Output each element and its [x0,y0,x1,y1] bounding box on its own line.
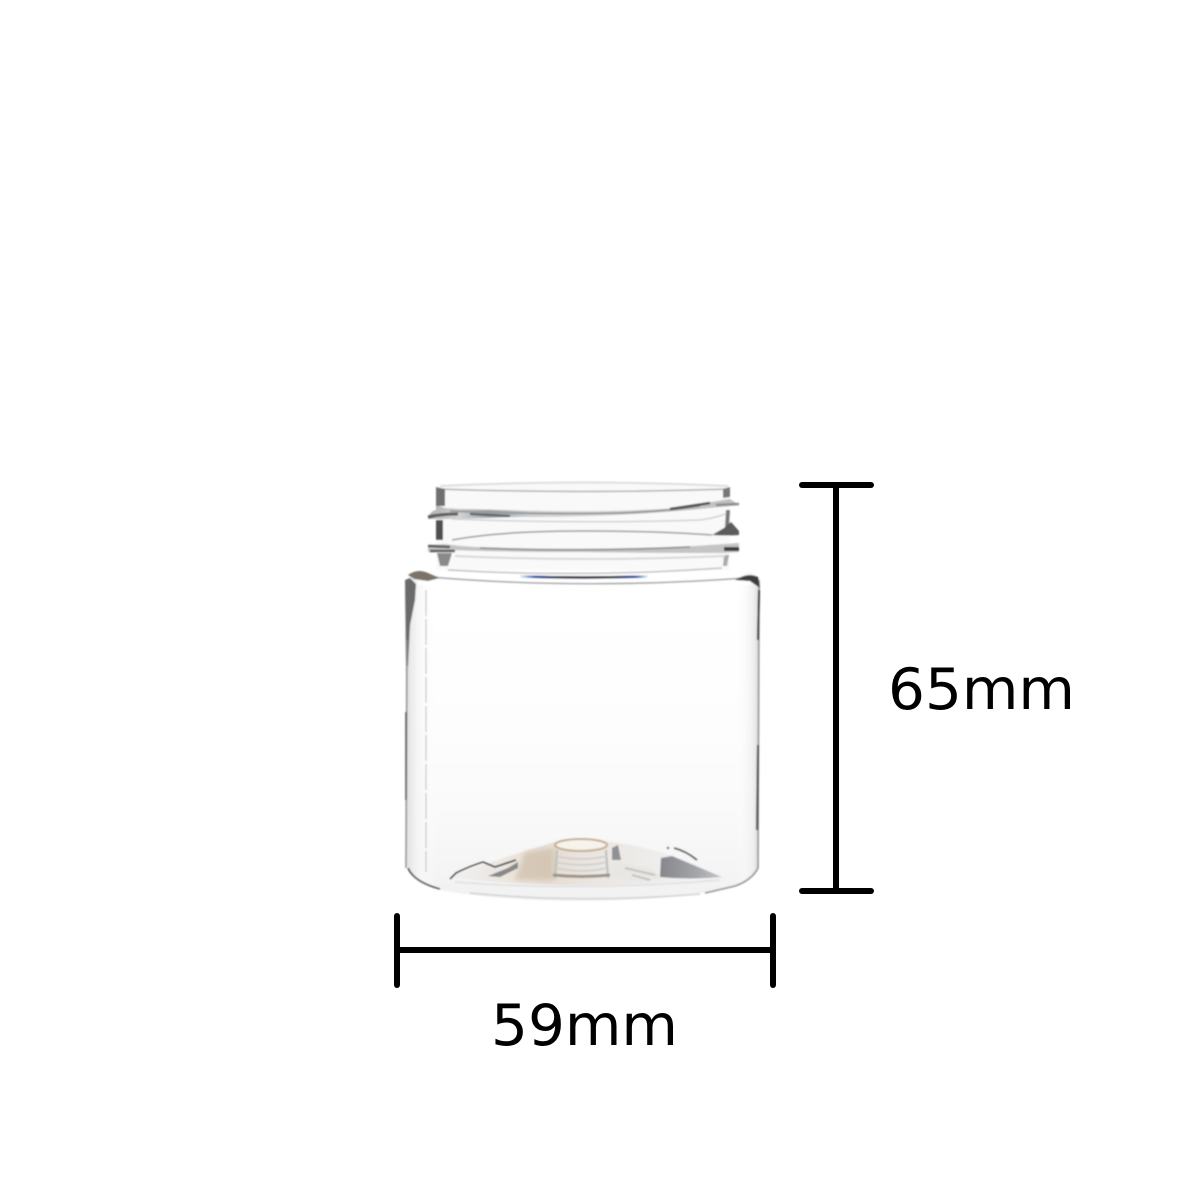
height label: 65mm [888,657,1075,723]
width label: 59mm [491,993,678,1059]
height dimension bracket [802,485,871,891]
width dimension bracket [397,916,773,985]
jar neck and threads [408,482,760,588]
jar photo [405,482,760,901]
jar base with embossing [450,839,722,899]
jar body [405,568,760,901]
